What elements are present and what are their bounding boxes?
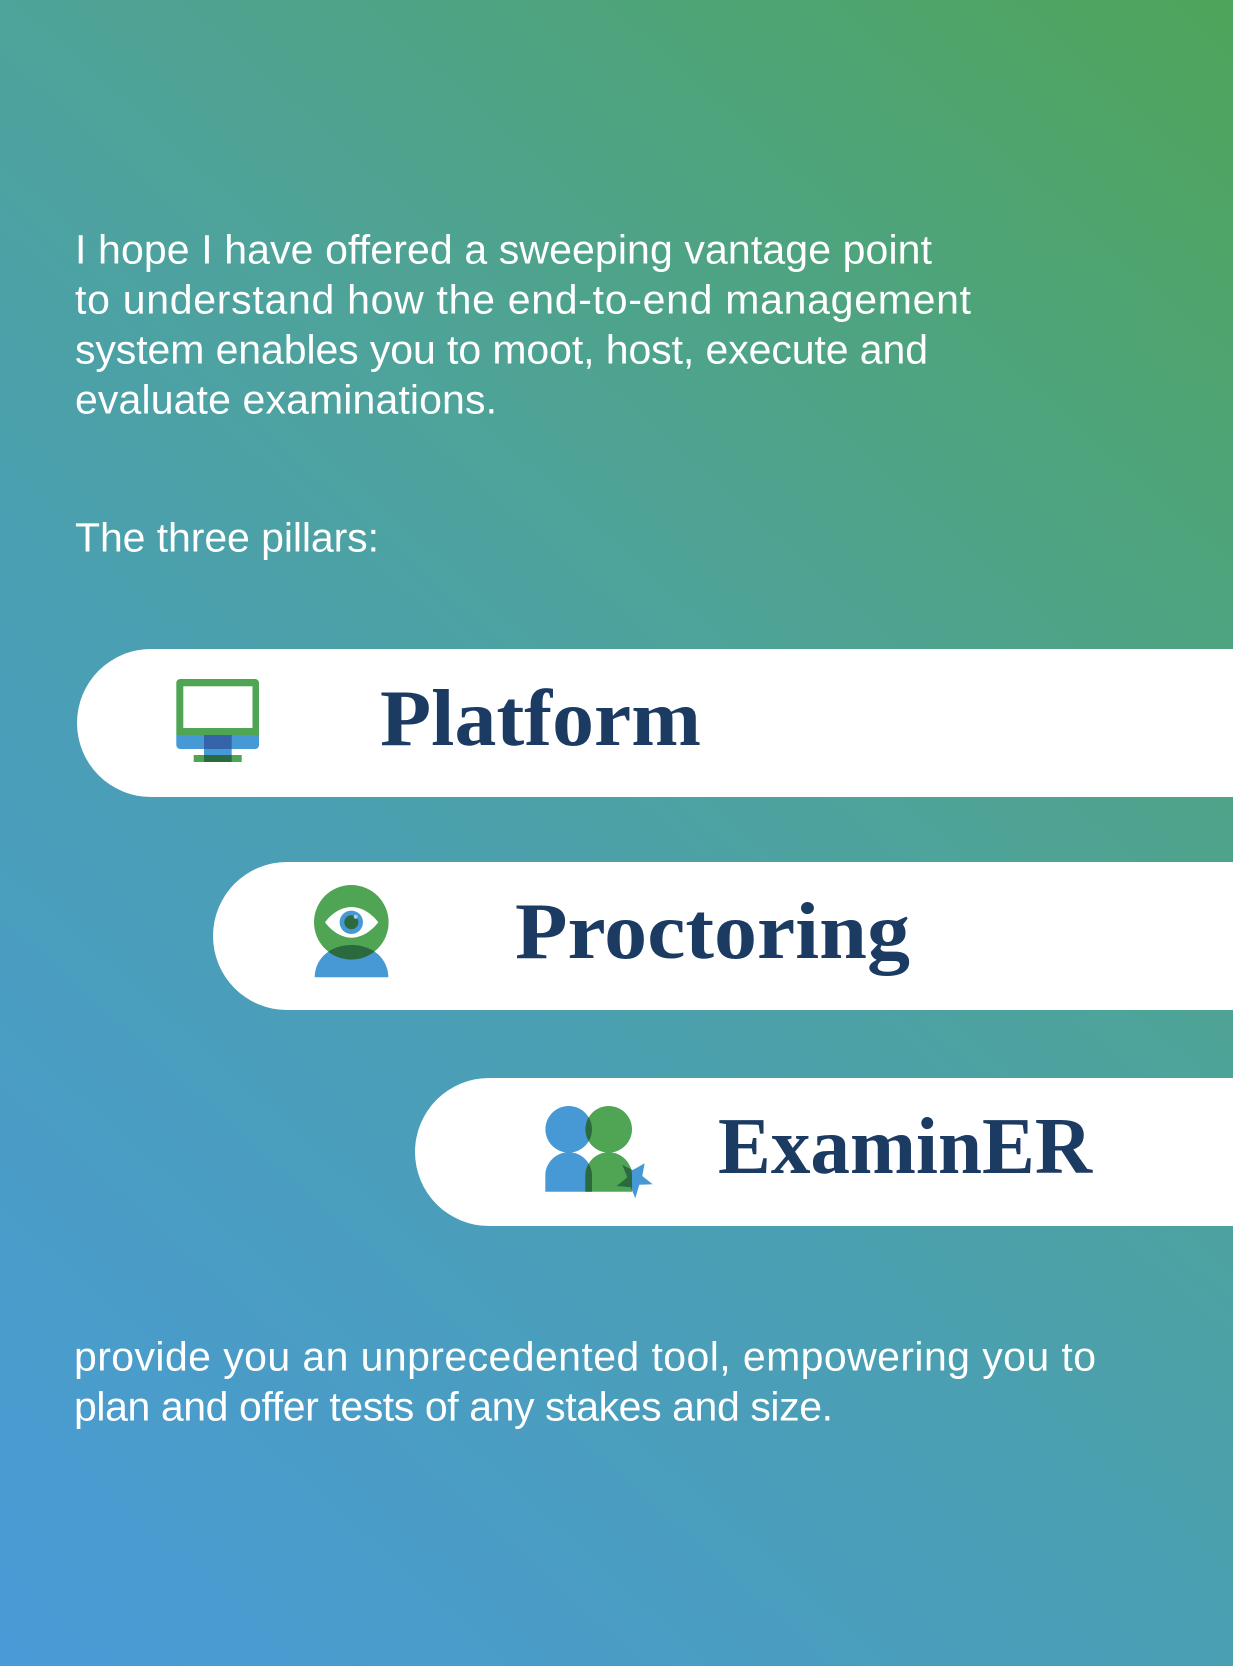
icon: proctor eye: [314, 885, 389, 977]
heading: Platform: Platform: [380, 673, 701, 763]
closing paragraph: [74, 1334, 1096, 1430]
closing paragraph: plan and offer tests of any stakes and size.: [74, 1384, 833, 1430]
heading: Proctoring: Proctoring: [515, 886, 910, 976]
icon: people with star: [545, 1106, 653, 1198]
intro paragraph: I hope I have offered a sweeping vantage point: [75, 226, 933, 272]
icon: monitor: [176, 679, 259, 762]
subheading: the three pillars: The three pillars:: [75, 514, 379, 560]
panel: Platform pill: [77, 649, 1233, 797]
intro paragraph: [75, 226, 972, 422]
closing paragraph: provide you an unprecedented tool, empowering you to: [74, 1334, 1096, 1380]
intro paragraph: to understand how the end-to-end management: [75, 276, 972, 322]
heading: ExaminER: ExaminER: [718, 1101, 1093, 1191]
intro paragraph: system enables you to moot, host, execute and: [75, 326, 928, 372]
panel: Proctoring pill: [213, 862, 1233, 1010]
panel: ExaminER pill: [415, 1078, 1233, 1226]
intro paragraph: evaluate examinations.: [75, 376, 497, 422]
